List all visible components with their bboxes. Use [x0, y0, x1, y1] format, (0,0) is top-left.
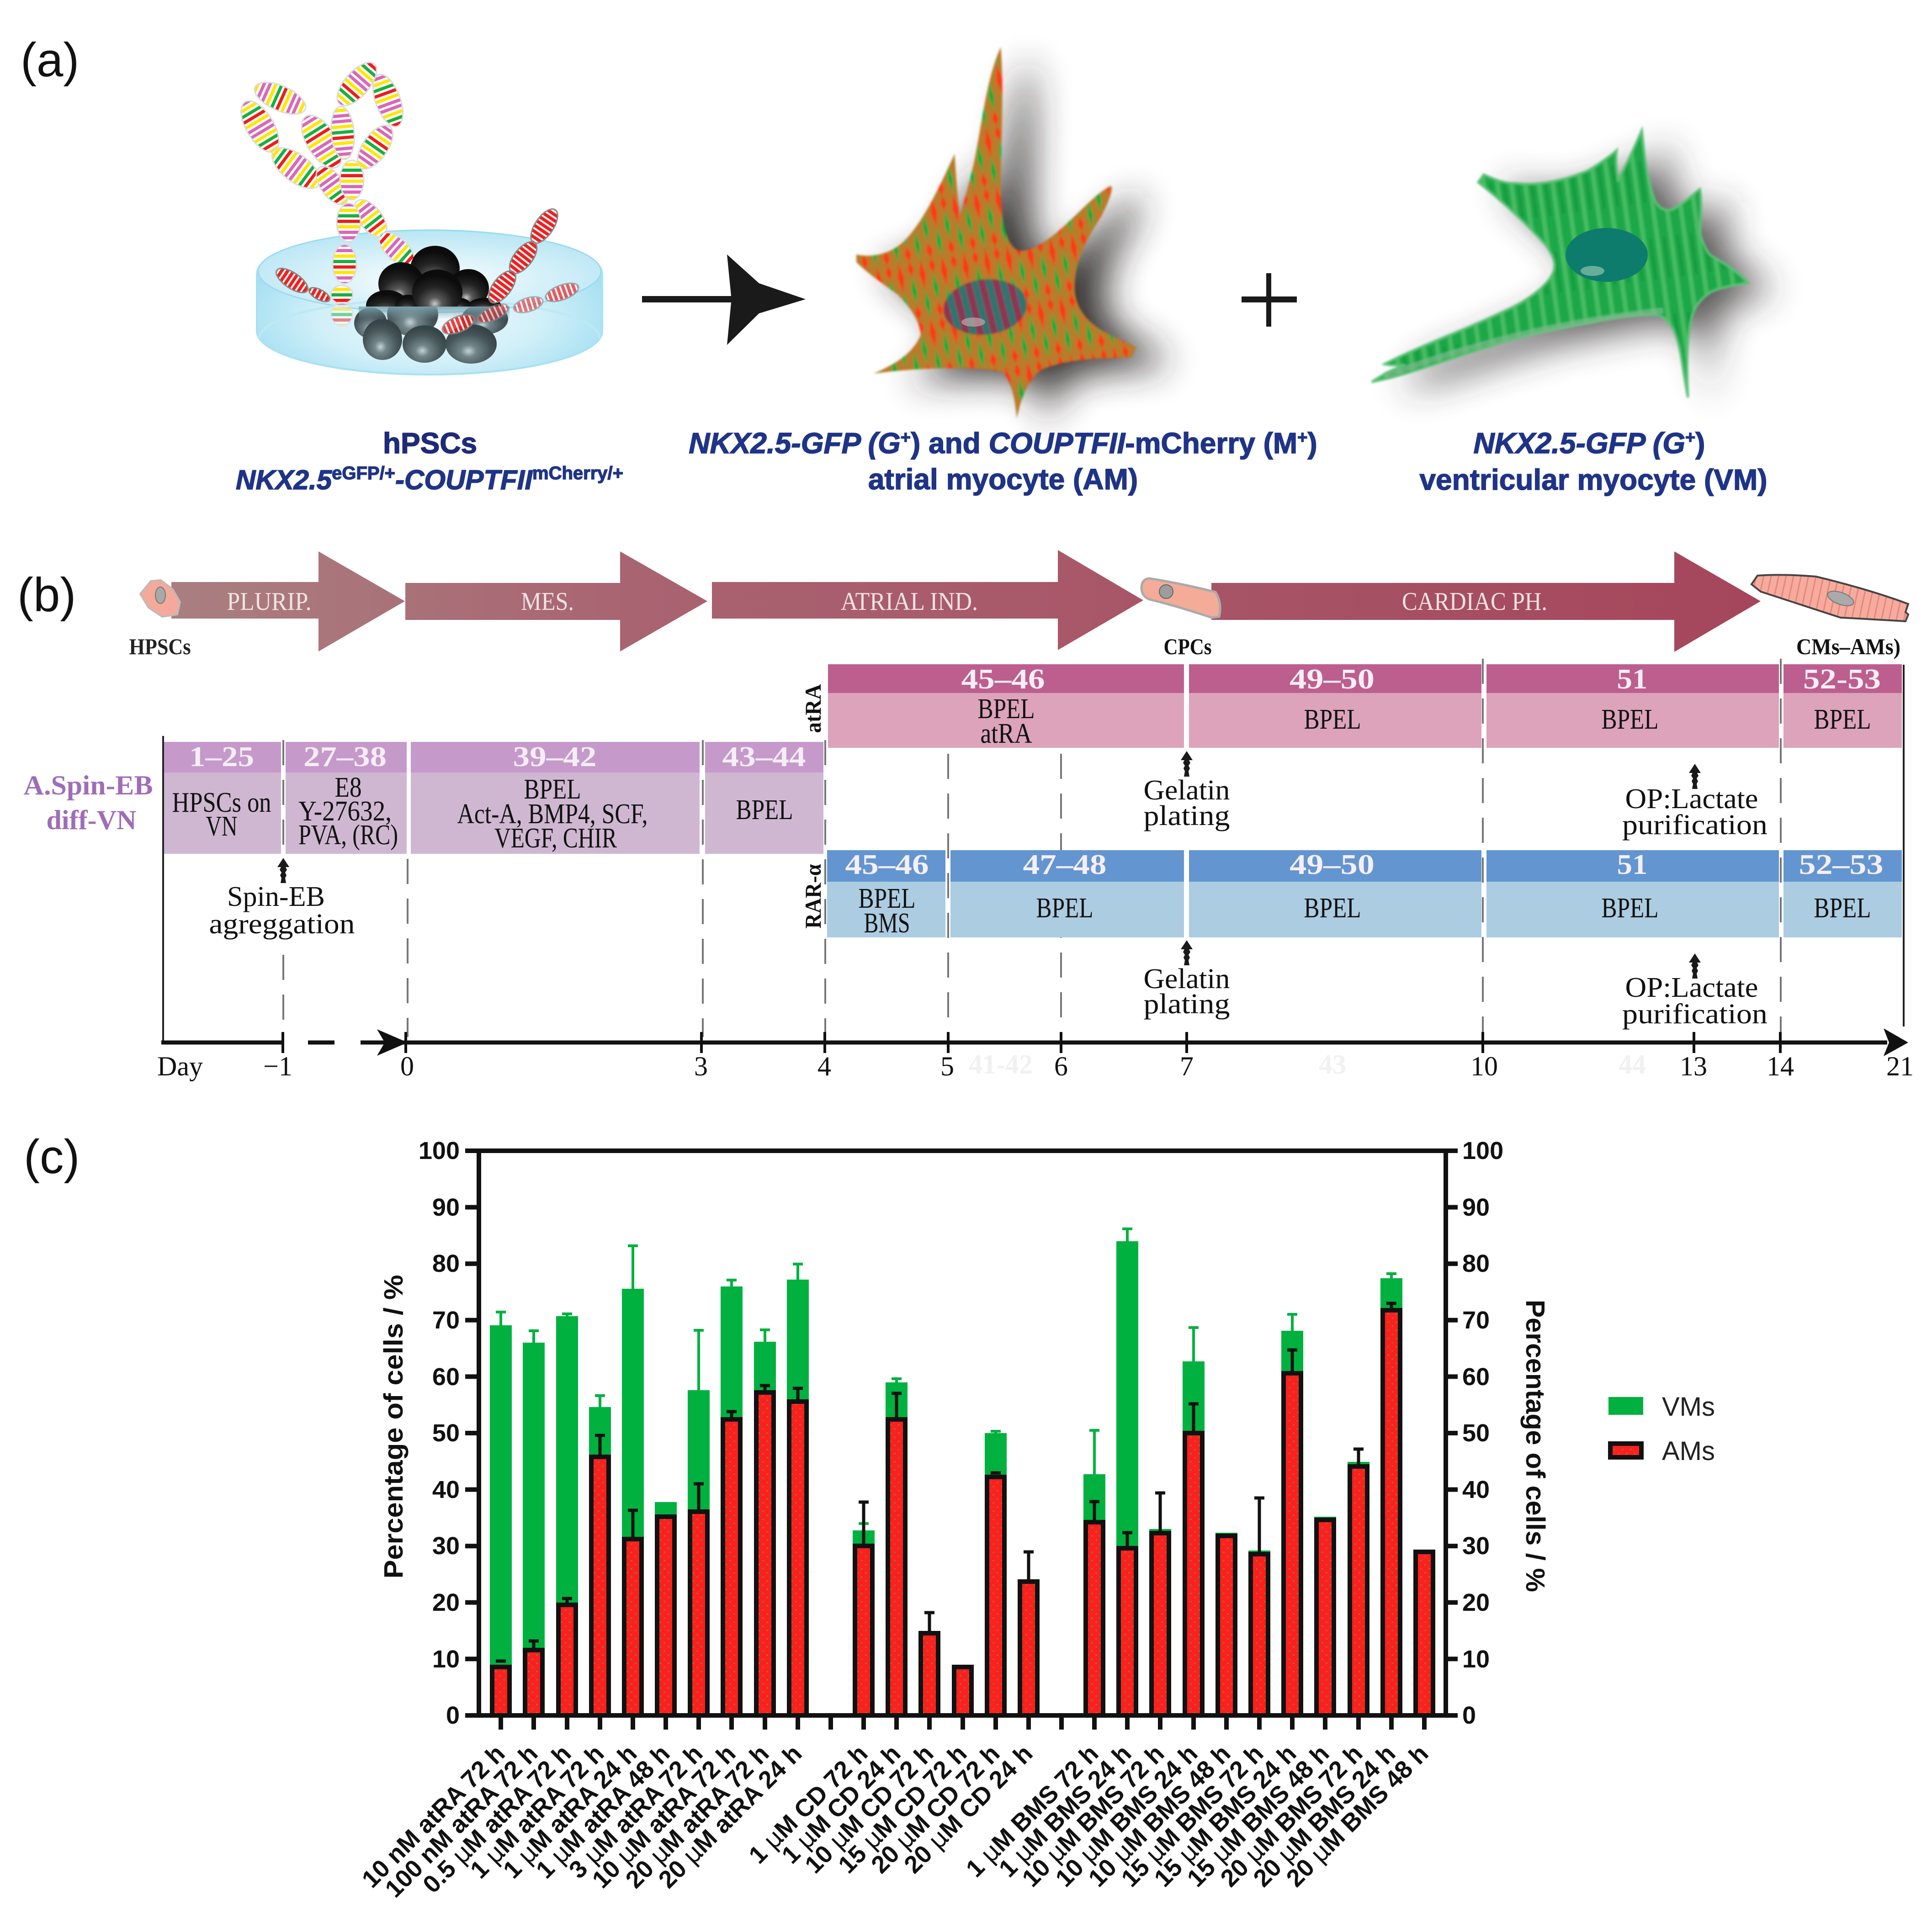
caption: ventricular myocyte: +	[1685, 428, 1695, 447]
x tick marks	[501, 1715, 1424, 1730]
panel label a: (a)	[21, 33, 79, 87]
day labels: −1	[263, 1051, 292, 1081]
right tick marks	[1446, 1207, 1458, 1659]
right y-axis tick labels: 100	[1462, 1137, 1503, 1164]
caption: atrial myocyte: atrial myocyte (AM)	[868, 463, 1138, 496]
stage 49-50	[1189, 664, 1481, 748]
caption: hPSCs: hPSCs	[383, 427, 477, 460]
label: CMs-AMs: CMs–AMs)	[1796, 634, 1900, 659]
panel a: differentiation overview	[21, 33, 1773, 496]
caption: atrial myocyte: )	[1307, 427, 1317, 460]
caption: atrial myocyte: NKX2.5-GFP (G	[689, 427, 901, 460]
stage 27-38: Y-27632,	[298, 796, 392, 827]
stage 27-38: E8	[334, 772, 362, 803]
day labels: 10	[1470, 1051, 1498, 1081]
icon: cardiomyocyte cell	[1752, 575, 1908, 621]
arrow: MES.	[405, 551, 707, 651]
legend: AMs	[1610, 1436, 1715, 1466]
left y-axis tick labels: 0	[446, 1702, 460, 1729]
dashed day guides	[283, 659, 1781, 1037]
left y-axis tick labels: 90	[432, 1194, 460, 1221]
annotation: Lactate purification atRA: purification	[1622, 810, 1767, 841]
legend: AMs: AMs	[1662, 1436, 1715, 1466]
stage 45-46: 45–46	[961, 664, 1045, 695]
annotation: Lactate purification RAR: purification	[1622, 999, 1767, 1030]
x-axis category labels: 20 μM CD 72 h	[865, 1739, 1005, 1879]
stage 43-44: 43–44	[722, 741, 806, 773]
day labels	[157, 1051, 1914, 1081]
caption: ventricular myocyte: ventricular myocyte (VM)	[1419, 463, 1767, 496]
bar: 1 uM CD 24 h	[886, 1379, 908, 1715]
faint residual labels: 41-42	[969, 1049, 1033, 1080]
icon: atrial myocyte cell	[856, 47, 1166, 428]
bar: 20 uM BMS 24 h	[1380, 1274, 1402, 1715]
day labels: 6	[1054, 1051, 1068, 1081]
left y-axis tick labels: 30	[432, 1532, 460, 1560]
stage 52-53: BPEL	[1814, 704, 1871, 735]
bar: 20 uM atRA 72 h	[754, 1330, 776, 1715]
stage 51: BPEL	[1601, 704, 1659, 735]
timeline row: RAR-alpha	[800, 849, 1902, 939]
bar: 3 uM atRA 72 h	[688, 1330, 710, 1715]
day labels: 21	[1886, 1051, 1914, 1081]
caption: atrial myocyte: +	[1297, 428, 1307, 447]
bar: 20 uM BMS 48 h	[1416, 1552, 1433, 1715]
stage 47-48: 47–48	[1023, 849, 1107, 880]
stage 39-42: Act-A, BMP4, SCF,	[457, 799, 648, 830]
x-axis category labels: 20 μM atRA 72 h	[620, 1739, 775, 1894]
annotation: Gelatin plating RAR	[1143, 940, 1230, 1020]
x-axis category labels: 10 μM BMS 24 h	[1050, 1739, 1203, 1893]
x-axis category labels: 10 nM atRA 72 h	[357, 1740, 510, 1893]
stage 51	[1486, 664, 1779, 748]
right y-axis tick labels: 50	[1462, 1419, 1490, 1447]
timeline row: A.Spin-EB diff-VN	[24, 741, 823, 854]
x-axis category labels: 3 μM atRA 72 h	[563, 1739, 708, 1884]
annotation: Spin-EB aggregation: Spin-EB	[227, 881, 325, 912]
stage 1-25	[164, 741, 281, 854]
stage 27-38: 27–38	[303, 741, 387, 773]
caption: hPSCs	[236, 427, 623, 495]
caption: hPSCs: NKX2.5	[236, 465, 332, 495]
annotation: Spin-EB aggregation: agreggation	[209, 909, 355, 940]
panel label b: (b)	[17, 568, 76, 622]
day labels: 4	[817, 1051, 831, 1081]
label: CPCs: CPCs	[1163, 634, 1212, 659]
right y-axis title: Percentage of cells / %	[1520, 1300, 1550, 1592]
arrow: MES.: MES.	[521, 587, 574, 616]
caption: atrial myocyte: +	[901, 428, 911, 447]
bar: 10 uM BMS 48 h	[1215, 1533, 1237, 1715]
right y-axis tick labels: 60	[1462, 1363, 1490, 1391]
x-axis category labels: 15 μM CD 72 h	[833, 1739, 972, 1879]
icon: CPC cell	[1141, 578, 1220, 618]
stage 27-38: PVA, (RC)	[298, 820, 398, 851]
annotation: Gelatin plating atRA: Gelatin	[1143, 775, 1230, 806]
right y-axis tick labels: 30	[1462, 1532, 1490, 1560]
right y-axis tick labels: 10	[1462, 1646, 1490, 1673]
annotation: Gelatin plating atRA: plating	[1143, 800, 1230, 831]
left y-axis tick labels: 80	[432, 1250, 460, 1277]
legend: VMs	[1608, 1392, 1715, 1422]
x-axis category labels: 15 μM BMS 24 h	[1148, 1739, 1302, 1893]
stage 47-48	[950, 849, 1184, 937]
left y-axis tick labels: 20	[432, 1589, 460, 1616]
stage 43-44: BPEL	[736, 794, 793, 826]
stage 49-50: BPEL	[1304, 704, 1361, 735]
stage arrows	[171, 550, 1761, 652]
row label RAR-alpha: RAR-α	[800, 864, 826, 928]
bar: 20 uM atRA 24 h	[787, 1264, 809, 1715]
row label: A.Spin-EB	[24, 770, 153, 800]
x-axis category labels: 10 μM CD 72 h	[799, 1739, 939, 1879]
bar: 10 uM BMS 72 h	[1149, 1493, 1171, 1715]
caption: hPSCs: mCherry/+	[532, 463, 623, 483]
x-axis category labels: 1 μM atRA 48 h	[530, 1739, 675, 1884]
left y-axis tick labels: 10	[432, 1646, 460, 1673]
stage 52-53: 52-53	[1803, 664, 1881, 695]
x-axis category labels: 1 μM BMS 24 h	[993, 1739, 1137, 1883]
day labels: 13	[1680, 1051, 1707, 1081]
stage 45-46	[828, 664, 1184, 749]
row label: diff-VN	[47, 805, 136, 835]
legend: VMs: VMs	[1662, 1392, 1715, 1422]
stage 49-50: BPEL	[1304, 893, 1361, 924]
stage 49-50: 49–50	[1290, 849, 1375, 880]
bar: 1 uM BMS 72 h	[1083, 1430, 1105, 1715]
stage 45-46: 45–46	[845, 849, 929, 880]
row label atRA: atRA	[800, 684, 826, 733]
caption: atrial myocyte: COUPTFII-mCherry (M	[989, 427, 1297, 460]
bars: BMS group	[1083, 1229, 1433, 1715]
x-axis category labels: 0.5 μM atRA 72 h	[417, 1739, 577, 1899]
left y-axis tick labels: 50	[432, 1419, 460, 1447]
stage 51	[1486, 849, 1779, 937]
x-axis category labels: 20 μM atRA 24 h	[653, 1739, 807, 1894]
right y-axis tick labels: 90	[1462, 1194, 1490, 1221]
stage 39-42: VEGF, CHIR	[494, 823, 617, 854]
stage 27-38	[286, 741, 407, 854]
stage 39-42: 39–42	[513, 741, 597, 773]
caption: ventricular myocyte: )	[1695, 427, 1705, 460]
panel label c: (c)	[24, 1130, 80, 1184]
caption: atrial myocyte	[689, 427, 1317, 496]
x-axis category labels: 1 μM atRA 72 h	[464, 1739, 610, 1884]
stage 45-46: BMS	[864, 908, 910, 939]
annotation: Gelatin plating atRA	[1143, 751, 1230, 831]
x-axis category labels: 20 μM CD 24 h	[898, 1739, 1038, 1879]
x-axis category labels: 1 μM atRA 24 h	[497, 1739, 642, 1884]
bar: 20 uM BMS 72 h	[1348, 1449, 1369, 1715]
faint residual labels	[969, 1049, 1646, 1080]
x-axis category labels: 100 nM atRA 72 h	[380, 1740, 543, 1903]
bar: 1 uM CD 72 h	[853, 1502, 875, 1715]
bar: 10 nM atRA 72 h	[490, 1312, 512, 1715]
faint residual labels: 44	[1619, 1049, 1646, 1080]
x-axis category labels	[357, 1739, 1434, 1903]
stage 45-46: BPEL	[978, 693, 1035, 725]
stage 45-46	[827, 849, 945, 939]
x-axis category labels: 1 μM CD 24 h	[776, 1739, 906, 1869]
stage 47-48: BPEL	[1036, 893, 1093, 924]
stage 39-42	[411, 741, 700, 854]
stage 52-53	[1783, 664, 1902, 748]
x-axis category labels: 10 μM BMS 48 h	[1083, 1739, 1236, 1893]
icon: hPSC petri dish with cell cluster and DNA	[234, 56, 602, 375]
left y-axis tick labels: 100	[419, 1137, 460, 1164]
left y-axis tick labels: 40	[432, 1476, 460, 1503]
bar: 0.5 uM atRA 72 h	[556, 1314, 578, 1715]
annotation: Spin-EB aggregation	[209, 858, 355, 940]
annotation: Gelatin plating RAR: plating	[1143, 989, 1230, 1020]
x-axis category labels: 10 μM BMS 72 h	[1016, 1739, 1170, 1893]
stage 51: 51	[1617, 664, 1648, 695]
bar: 1 uM BMS 24 h	[1116, 1229, 1138, 1715]
icon: HPSC cell	[140, 580, 180, 617]
caption: atrial myocyte: ) and	[911, 427, 989, 460]
annotation: Lactate purification atRA: OP:Lactate	[1625, 783, 1758, 815]
stage 43-44	[705, 741, 823, 854]
bar: 15 uM CD 72 h	[954, 1667, 971, 1715]
x-axis category labels: 20 μM BMS 72 h	[1215, 1739, 1368, 1893]
bar: 15 uM BMS 48 h	[1314, 1517, 1336, 1715]
right y-axis tick labels: 20	[1462, 1589, 1490, 1616]
timeline row: atRA	[800, 664, 1902, 749]
day labels: 7	[1180, 1051, 1194, 1081]
caption: hPSCs: eGFP/+	[332, 463, 395, 483]
panel c: stacked bar chart of AMs and VMs	[24, 1130, 1715, 1903]
x-axis category labels: 1 μM CD 72 h	[743, 1739, 873, 1869]
x-axis category labels: 15 μM BMS 72 h	[1115, 1739, 1269, 1893]
stage 45-46: BPEL	[858, 883, 916, 914]
right y-axis tick labels: 70	[1462, 1307, 1490, 1334]
arrow: CARDIAC PH.	[1211, 551, 1761, 652]
legend	[1608, 1392, 1715, 1466]
day labels: 3	[694, 1051, 708, 1081]
x-axis category labels: 20 μM BMS 48 h	[1280, 1739, 1434, 1893]
arrow: hPSCs to cardiomyocytes	[642, 254, 806, 345]
arrow: PLURIP.	[171, 551, 405, 651]
panel b: differentiation protocol timeline	[17, 550, 1914, 1081]
arrow: CARDIAC PH.: CARDIAC PH.	[1402, 587, 1547, 616]
left y-axis tick labels: 60	[432, 1363, 460, 1391]
caption: hPSCs: -COUPTFII	[395, 465, 533, 495]
stage 52-53: BPEL	[1814, 893, 1871, 924]
row label	[24, 770, 153, 835]
stage 52-53: 52–53	[1799, 849, 1884, 880]
left y-axis tick labels	[419, 1137, 460, 1729]
stage 51: BPEL	[1601, 893, 1659, 924]
plus sign	[1242, 273, 1297, 327]
icon: ventricular myocyte cell	[1372, 130, 1773, 407]
right y-axis tick labels: 0	[1462, 1702, 1476, 1729]
x-axis category labels: 20 μM BMS 24 h	[1247, 1739, 1401, 1893]
annotation: Gelatin plating RAR: Gelatin	[1143, 963, 1230, 995]
stage 52-53	[1783, 849, 1902, 937]
annotation: Lactate purification RAR: OP:Lactate	[1625, 972, 1758, 1003]
day labels: 0	[400, 1051, 414, 1081]
bar: 15 uM BMS 24 h	[1281, 1314, 1303, 1715]
stage 49-50	[1189, 849, 1481, 937]
arrow: ATRIAL IND.	[712, 550, 1143, 650]
x-axis category labels: 15 μM BMS 48 h	[1181, 1739, 1335, 1893]
stage 1-25: HPSCs on	[172, 787, 271, 818]
right y-axis tick labels: 80	[1462, 1250, 1490, 1277]
right y-axis tick labels	[1462, 1137, 1503, 1729]
day axis	[157, 665, 1914, 1081]
bar: 15 uM BMS 72 h	[1248, 1498, 1270, 1715]
left tick marks	[465, 1207, 479, 1659]
stage 1-25: VN	[206, 811, 238, 842]
x-axis category labels: 1 μM BMS 72 h	[960, 1739, 1104, 1883]
chart axes	[465, 1148, 1458, 1730]
bar: 10 uM BMS 24 h	[1183, 1328, 1205, 1715]
bars: CD group	[853, 1379, 1037, 1715]
faint residual labels: 43	[1319, 1049, 1346, 1080]
caption: ventricular myocyte	[1419, 427, 1767, 496]
bar: 10 uM atRA 72 h	[721, 1280, 743, 1715]
day labels: 5	[940, 1051, 954, 1081]
bar: 20 uM CD 24 h	[1020, 1552, 1037, 1715]
stage 51: 51	[1617, 849, 1648, 880]
arrow: PLURIP.: PLURIP.	[227, 587, 312, 616]
bars: atRA group	[490, 1246, 809, 1715]
annotation: Lactate purification atRA	[1622, 764, 1767, 841]
annotation: Lactate purification RAR	[1622, 953, 1767, 1030]
x-axis category labels: 10 μM atRA 72 h	[586, 1739, 741, 1894]
day labels: Day	[157, 1051, 203, 1081]
bar: 1 uM atRA 24 h	[622, 1246, 644, 1715]
label: HPSCs: HPSCs	[129, 634, 191, 659]
bar: 100 nM atRA 72 h	[523, 1331, 545, 1715]
day labels: 14	[1767, 1051, 1794, 1081]
bar: 1 uM atRA 48 h	[655, 1502, 677, 1715]
stage 39-42: BPEL	[524, 774, 581, 805]
caption: ventricular myocyte: NKX2.5-GFP (G	[1474, 427, 1685, 460]
right y-axis tick labels: 40	[1462, 1476, 1490, 1503]
left y-axis tick labels: 70	[432, 1307, 460, 1334]
stage 45-46: atRA	[981, 718, 1032, 749]
stage 1-25: 1–25	[189, 741, 254, 773]
bar: 20 uM CD 72 h	[985, 1431, 1007, 1715]
bar: 10 uM CD 72 h	[921, 1613, 938, 1715]
left y-axis title: Percentage of cells / %	[379, 1275, 409, 1579]
arrow: ATRIAL IND.: ATRIAL IND.	[841, 587, 978, 616]
stage 49-50: 49–50	[1290, 664, 1375, 695]
bar: 1 uM atRA 72 h	[589, 1396, 611, 1715]
